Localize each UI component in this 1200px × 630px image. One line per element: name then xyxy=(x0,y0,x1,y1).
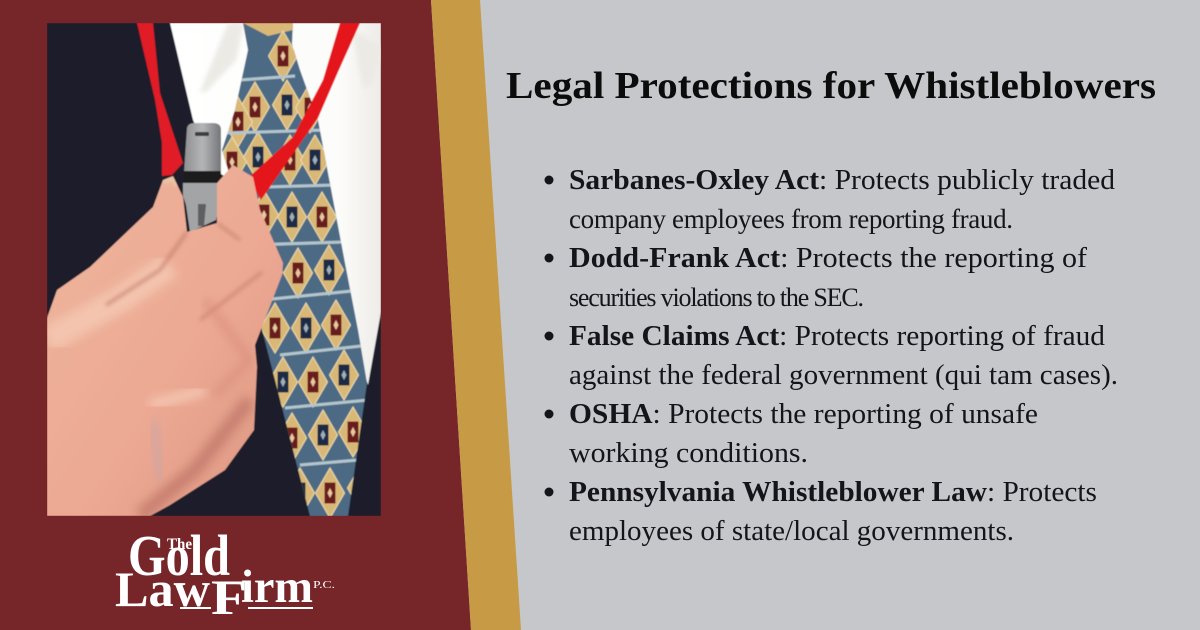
suit jacket xyxy=(47,23,381,516)
logo: The Gold Law Firm P.C.: Law xyxy=(115,561,210,617)
necktie xyxy=(215,23,376,518)
hand xyxy=(47,160,287,520)
item: OSHA: working conditions. xyxy=(569,437,808,469)
item: OSHA xyxy=(544,398,1038,469)
title: Legal Protections for Whistleblowers xyxy=(506,65,1156,107)
white shirt xyxy=(170,23,381,385)
red lanyard xyxy=(137,23,183,176)
bullet list xyxy=(544,164,1118,547)
photo: hand holding whistle over suit and tie xyxy=(47,23,381,520)
logo: The Gold Law Firm P.C.: irm xyxy=(241,561,313,613)
metal whistle xyxy=(183,123,221,232)
item: Dodd-Frank Act: Dodd-Frank Act : Protects the reporting of xyxy=(569,242,1087,274)
logo: The Gold Law Firm P.C.: P.C. xyxy=(313,579,335,591)
item: OSHA: OSHA: Protects the reporting of unsafe xyxy=(569,398,1038,430)
item: False Claims Act xyxy=(544,320,1118,391)
item: Sarbanes-Oxley Act xyxy=(544,164,1115,234)
shirt collar shadows xyxy=(200,23,381,92)
item: False Claims Act: against the federal government (qui tam cases). xyxy=(569,359,1118,391)
logo: The Gold Law Firm P.C.: The xyxy=(167,536,192,553)
gold diagonal band xyxy=(431,0,521,630)
item: Dodd-Frank Act xyxy=(544,242,1087,312)
logo: The Gold Law Firm P.C.: F xyxy=(211,569,247,625)
item: Dodd-Frank Act: securities violations to the SEC. xyxy=(569,283,864,312)
item: Sarbanes-Oxley Act: Sarbanes-Oxley Act: Protects publicly traded xyxy=(569,164,1115,196)
hand shading and knuckle creases xyxy=(47,178,262,516)
logo: The Gold Law Firm P.C.: Gold xyxy=(128,523,230,588)
item: Pennsylvania Whistleblower Law: employees of state/local governments. xyxy=(569,515,1014,547)
item: Sarbanes-Oxley Act: company employees from reporting fraud. xyxy=(569,204,1013,234)
item: Pennsylvania Whistleblower Law xyxy=(544,476,1097,547)
item: Pennsylvania Whistleblower Law: Pennsylvania Whistleblower Law: Protects xyxy=(569,476,1097,508)
item: False Claims Act: False Claims Act: Protects reporting of fraud xyxy=(569,320,1105,352)
panel: maroon left side xyxy=(0,0,471,630)
logo: The Gold Law Firm P.C. xyxy=(115,523,335,625)
